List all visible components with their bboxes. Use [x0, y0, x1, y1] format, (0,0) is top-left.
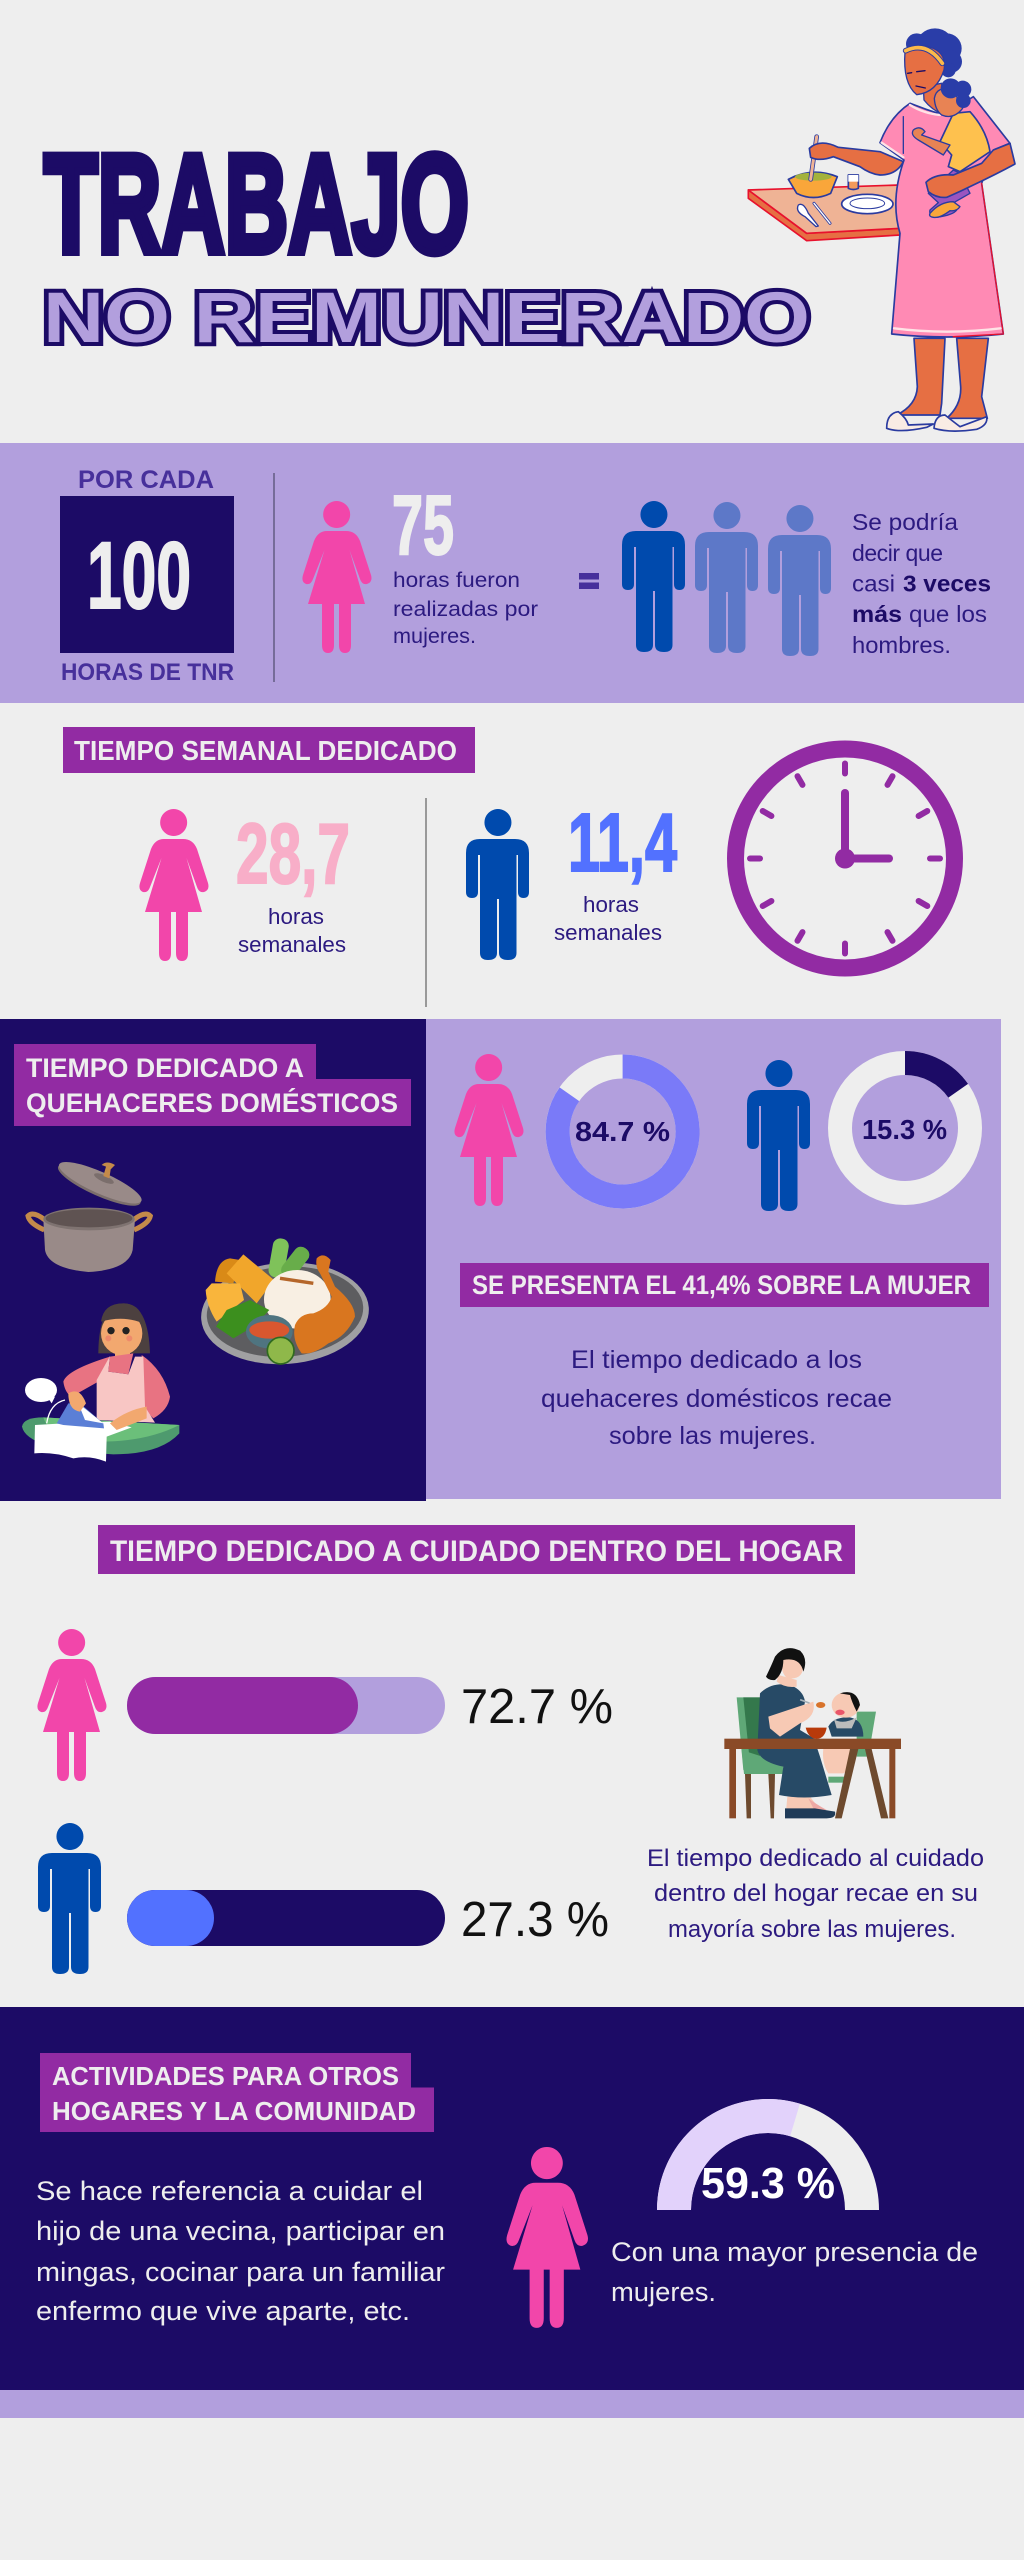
text: domestic description: El tiempo dedicado a los: [571, 1346, 862, 1374]
text: almost 3 times more: casi: [852, 570, 895, 596]
text: hours women: [238, 904, 346, 957]
donut chart: women 84.7: [558, 1066, 688, 1197]
number: 75: 75: [392, 478, 454, 572]
icon: woman: [507, 2147, 588, 2328]
donut chart: men 15.3: [840, 1063, 970, 1193]
text: almost 3 times more: [852, 509, 991, 658]
text: greater presence of women: mujeres.: [611, 2277, 716, 2307]
heading: tiempo semanal: [63, 727, 475, 773]
text: hours women: semanales: [238, 932, 346, 957]
number: 28,7: 28,7: [236, 807, 350, 902]
gauge chart: 59.3: 59.3 %: [701, 2159, 835, 2208]
icon: man: [466, 809, 529, 960]
gauge chart: 59.3: [674, 2116, 862, 2210]
text: almost 3 times more: hombres.: [852, 632, 951, 658]
box: 100: [60, 496, 234, 653]
text: almost 3 times more: decir que: [852, 540, 943, 566]
illustration: pot: [28, 1155, 150, 1272]
text: activities description: hijo de una vecina, participar en: [36, 2216, 445, 2246]
text: hours men: [554, 892, 662, 945]
text: domestic description: quehaceres domésticos recae: [541, 1385, 892, 1413]
text: almost 3 times more: Se podría: [852, 509, 958, 535]
panel: domestic chores right: [426, 1019, 1001, 1499]
number: 11,4: 11,4: [568, 796, 677, 889]
text: activities description: [36, 2176, 445, 2326]
icon: man solid: [622, 501, 685, 652]
text: domestic description: sobre las mujeres.: [609, 1422, 816, 1450]
panel: weekly time: [63, 727, 954, 1007]
text: domestic description: [541, 1346, 892, 1450]
illustration: woman ironing: [22, 1303, 179, 1462]
text: care description: mayoría sobre las mujeres.: [668, 1916, 956, 1943]
text: hours by women: mujeres.: [393, 625, 476, 648]
illustration: food plate: [198, 1237, 372, 1370]
text: care description: dentro del hogar recae en su: [654, 1880, 978, 1907]
text: hours men: horas: [583, 892, 639, 917]
heading: quehaceres: QUEHACERES DOMÉSTICOS: [26, 1087, 398, 1118]
heading: actividades: HOGARES Y LA COMUNIDAD: [52, 2096, 416, 2126]
icon: woman: [139, 809, 208, 961]
text: activities description: Se hace referencia a cuidar el: [36, 2176, 423, 2206]
icon: woman: [454, 1054, 524, 1206]
illustration: mother feeding baby: [724, 1648, 901, 1818]
donut chart: women 84.7: 84.7 %: [575, 1116, 670, 1147]
text: greater presence of women: Con una mayor presencia de: [611, 2237, 978, 2267]
text: care description: [647, 1845, 984, 1943]
text: greater presence of women: [611, 2237, 978, 2307]
bar: men 27.3: 27.3 %: [461, 1893, 609, 1947]
heading: actividades: [40, 2053, 434, 2132]
text: almost 3 times more: más: [852, 601, 902, 627]
text: care description: El tiempo dedicado al cuidado: [647, 1845, 984, 1872]
panel: community activities: [0, 2007, 1024, 2418]
heading: quehaceres: [14, 1044, 411, 1126]
text: almost 3 times more: 3 veces: [903, 570, 991, 596]
panel: domestic chores left: [0, 1019, 426, 1501]
callout: 41,4%: [460, 1263, 989, 1307]
equals sign: [579, 573, 599, 589]
panel: por cada 100 horas: [0, 443, 1024, 703]
heading: cuidado: TIEMPO DEDICADO A CUIDADO DENTRO DEL HOGAR: [110, 1535, 843, 1568]
icon: man faded 1: [695, 502, 758, 653]
callout: 41,4%: SE PRESENTA EL 41,4% SOBRE LA MUJER: [472, 1270, 971, 1300]
icon: man: [747, 1060, 810, 1211]
box: 100: 100: [87, 523, 191, 629]
panel: care in the home: [37, 1525, 984, 1974]
heading: tiempo semanal: TIEMPO SEMANAL DEDICADO: [74, 735, 457, 766]
text: hours men: semanales: [554, 920, 662, 945]
title line: trabajo: TRABAJO: [44, 125, 469, 282]
text: almost 3 times more: que los: [909, 601, 987, 627]
icon: man faded 2: [768, 505, 831, 656]
donut chart: men 15.3: 15.3 %: [862, 1114, 947, 1145]
text: hours women: horas: [268, 904, 324, 929]
bar: men 27.3: [127, 1890, 609, 1947]
text: hours by women: [393, 569, 538, 648]
icon: woman: [37, 1629, 106, 1781]
title line: no remunerado: NO REMUNERADO: [43, 279, 810, 358]
text: activities description: mingas, cocinar para un familiar: [36, 2257, 445, 2287]
heading: quehaceres: TIEMPO DEDICADO A: [26, 1053, 304, 1083]
title: [43, 125, 810, 358]
heading: actividades: ACTIVIDADES PARA OTROS: [52, 2061, 399, 2091]
por cada label: POR CADA: [78, 466, 214, 494]
illustration: mother cooking holding child: [748, 28, 1015, 431]
text: activities description: enfermo que vive aparte, etc.: [36, 2296, 410, 2326]
icon: clock: [736, 749, 954, 968]
text: hours by women: horas fueron: [393, 569, 520, 592]
heading: cuidado: [98, 1525, 855, 1574]
icon: woman: [302, 501, 372, 653]
bar: women 72.7: [127, 1677, 613, 1734]
horas de tnr label: HORAS DE TNR: [61, 659, 234, 686]
text: hours by women: realizadas por: [393, 598, 538, 621]
icon: man: [38, 1823, 101, 1974]
bar: women 72.7: 72.7 %: [461, 1680, 613, 1734]
